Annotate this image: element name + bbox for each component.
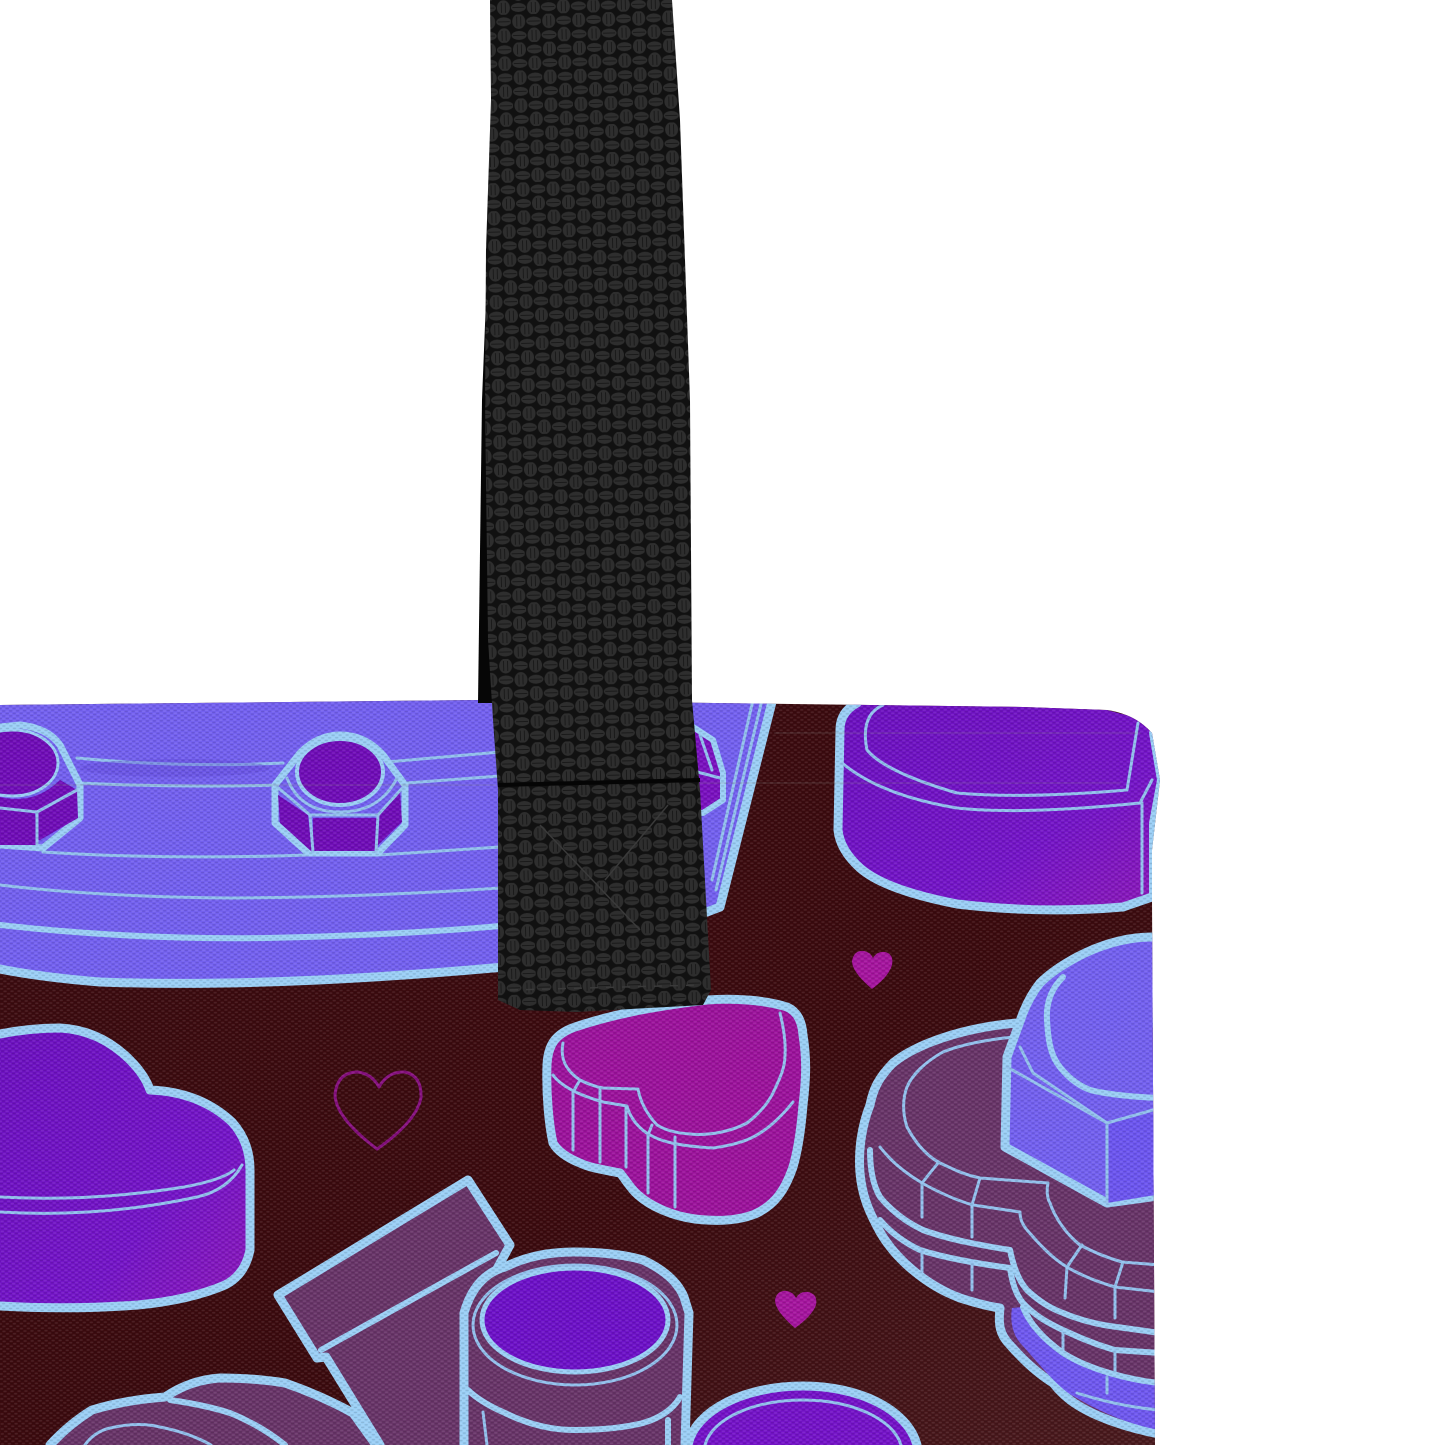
periwinkle band [0,698,773,983]
icon: bottom cylinder [688,1386,917,1445]
icon: outline heart [335,1072,421,1149]
icon: mauve rectangle bar [278,1180,510,1445]
icon: cylinder with purple top [464,1252,689,1445]
seam lines [0,733,1140,785]
icon: nut centre [275,735,405,853]
group: bag print [0,698,1165,1445]
icon: bottom left mauve object [50,1378,376,1445]
icon: periwinkle nut on stack [1005,937,1165,1203]
icon: small magenta heart lower [775,1291,816,1328]
fabric texture [0,700,1160,1445]
icon: magenta heart box [547,999,806,1220]
icon: purple heart box top right [838,700,1160,910]
icon: mauve stacked discs [859,1023,1165,1435]
icon: nut behind strap [690,727,723,813]
icon: large purple heart box [0,1028,250,1308]
icon: small magenta heart [852,951,892,989]
panel: bag body [0,700,1160,1445]
strap: black webbing handle [478,0,711,1012]
icon: nut left [0,725,80,848]
